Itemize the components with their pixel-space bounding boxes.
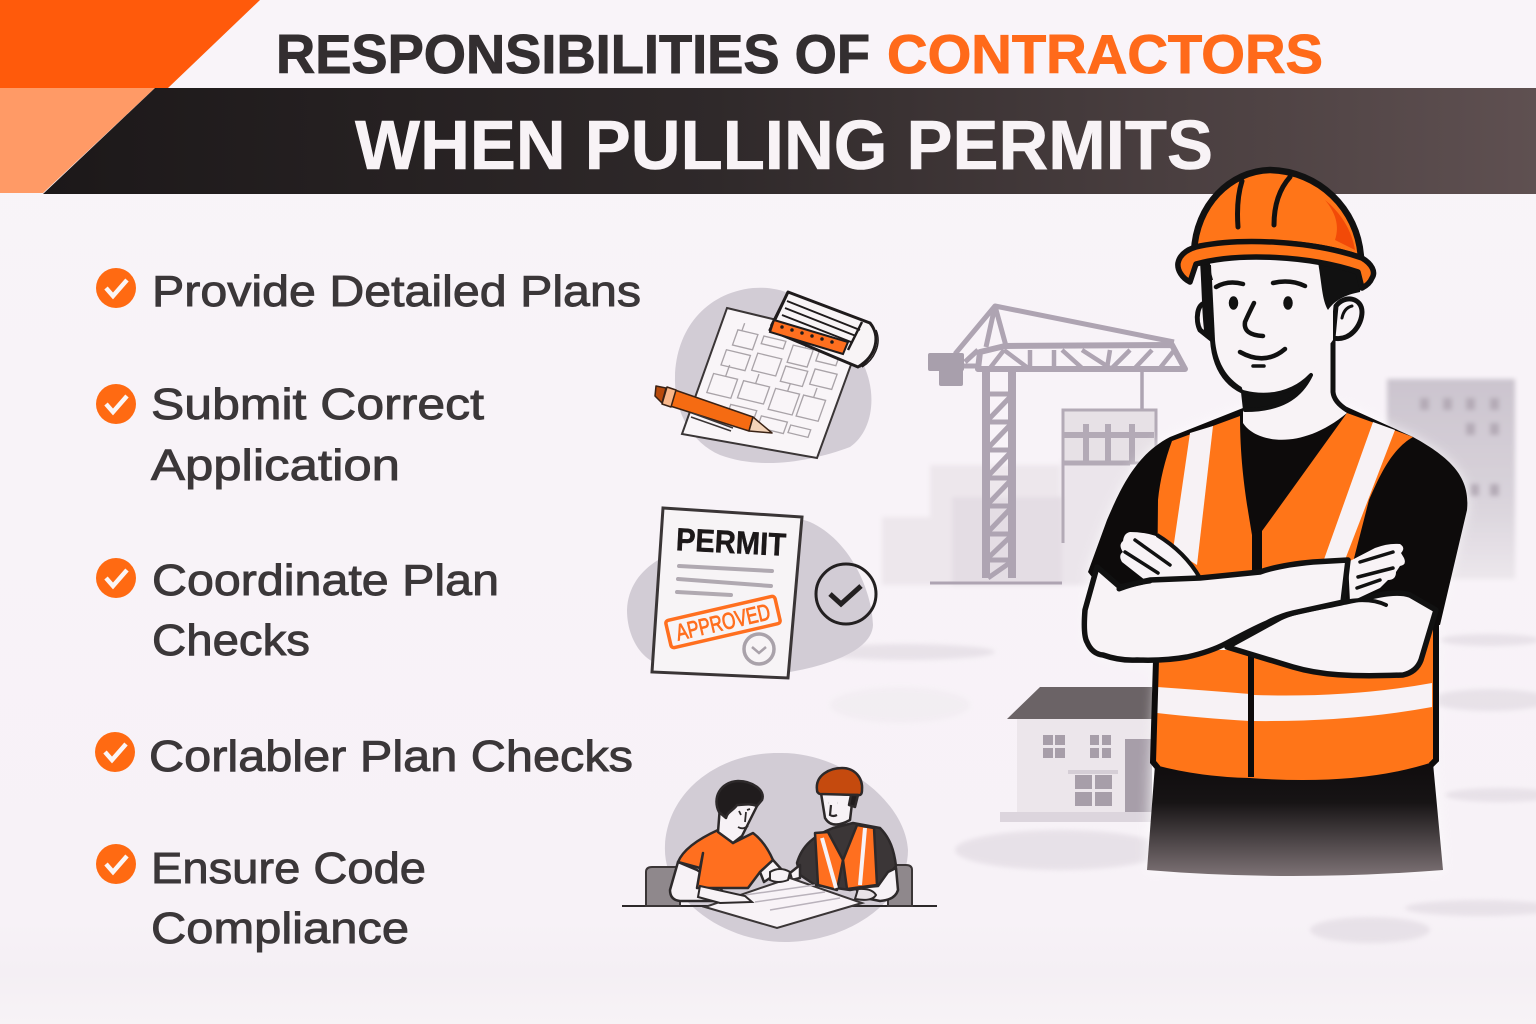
black shirt [1088,407,1467,625]
arm crease [1119,581,1150,589]
item: ensure code compliance [96,844,426,953]
vest upper [1157,413,1413,600]
apartment block right [1387,379,1515,579]
counterweight [928,353,964,386]
blob backdrop [665,753,908,942]
permit sheet [652,508,802,678]
background construction scene [815,306,1536,943]
orange corner [0,0,260,88]
header band [0,0,1536,194]
trousers [1147,763,1443,876]
item: ensure code compliance: Ensure Code [151,844,426,893]
jaw line and collar shadow [1209,265,1311,410]
hands and pen [698,869,876,903]
tower crane [928,306,1185,583]
item: submit correct application: Submit Correct [151,380,484,429]
left arm front [1084,560,1348,660]
ear right [1333,299,1362,339]
item: coordinate plan checks: Coordinate Plan [152,556,499,605]
left person face [738,809,750,828]
item: ensure code compliance: Compliance [151,904,409,953]
neck [1243,330,1347,440]
vest lower [1153,620,1436,780]
face [1208,262,1333,395]
right person face [828,803,837,816]
icon: detailed plans [655,288,878,463]
faded buildings left [882,460,1132,585]
faded ground patches [815,634,1536,943]
crane base [930,582,1062,584]
blob backdrop [627,518,873,676]
left hand fingers [1120,532,1200,584]
neck outline [1333,335,1347,410]
hair [1200,262,1362,340]
pencil underline marks [691,413,733,431]
title line two: WHEN PULLING PERMITS [355,106,1213,184]
approved stamp: APPROVED [673,599,773,645]
document lines [745,885,840,910]
approved stamp [665,596,781,648]
checklist [95,267,641,953]
table line [622,905,937,907]
worker figure [1084,170,1467,876]
rolled plans [770,292,878,367]
blueprint sketches [699,320,847,441]
shared document [705,878,862,928]
light orange corner [0,88,155,193]
item: coordinate plan checks: Checks [152,616,310,665]
right hand fingers [1348,544,1405,602]
dark banner [43,88,1536,194]
forearm crease [1343,600,1386,605]
chairs [646,865,912,906]
chin fill [1212,270,1333,391]
check badge [816,564,876,624]
blob backdrop [675,288,871,463]
small seal [744,634,774,664]
permit text lines [677,566,772,595]
blueprint sheet [682,308,860,458]
right arm tucked under [1227,593,1436,676]
pencil [655,386,772,433]
title accent: CONTRACTORS [887,23,1323,85]
item: submit correct application: Application [151,441,400,490]
ear left [1197,303,1210,338]
icon: collaborating team [622,753,937,942]
ear detail [1342,306,1352,318]
crane jib [955,306,1185,369]
item: provide detailed plans: Provide Detailed Plans [152,267,641,316]
icon: approved permit [627,508,876,678]
item: coordinate plan checks [96,556,499,665]
crane mast [986,372,1012,578]
hoist line and hook [1122,370,1156,443]
hard hat [1178,170,1374,288]
left person [670,781,782,901]
house [1000,687,1152,822]
item: corlabler plan checks: Corlabler Plan Checks [149,732,633,781]
item: submit correct application [96,380,484,490]
right person [790,768,898,901]
soft halo [1085,407,1467,870]
permit heading: PERMIT [675,521,787,563]
face features [1216,282,1305,366]
title line one: RESPONSIBILITIES OF [276,23,870,85]
building frame on hook [1063,410,1156,543]
